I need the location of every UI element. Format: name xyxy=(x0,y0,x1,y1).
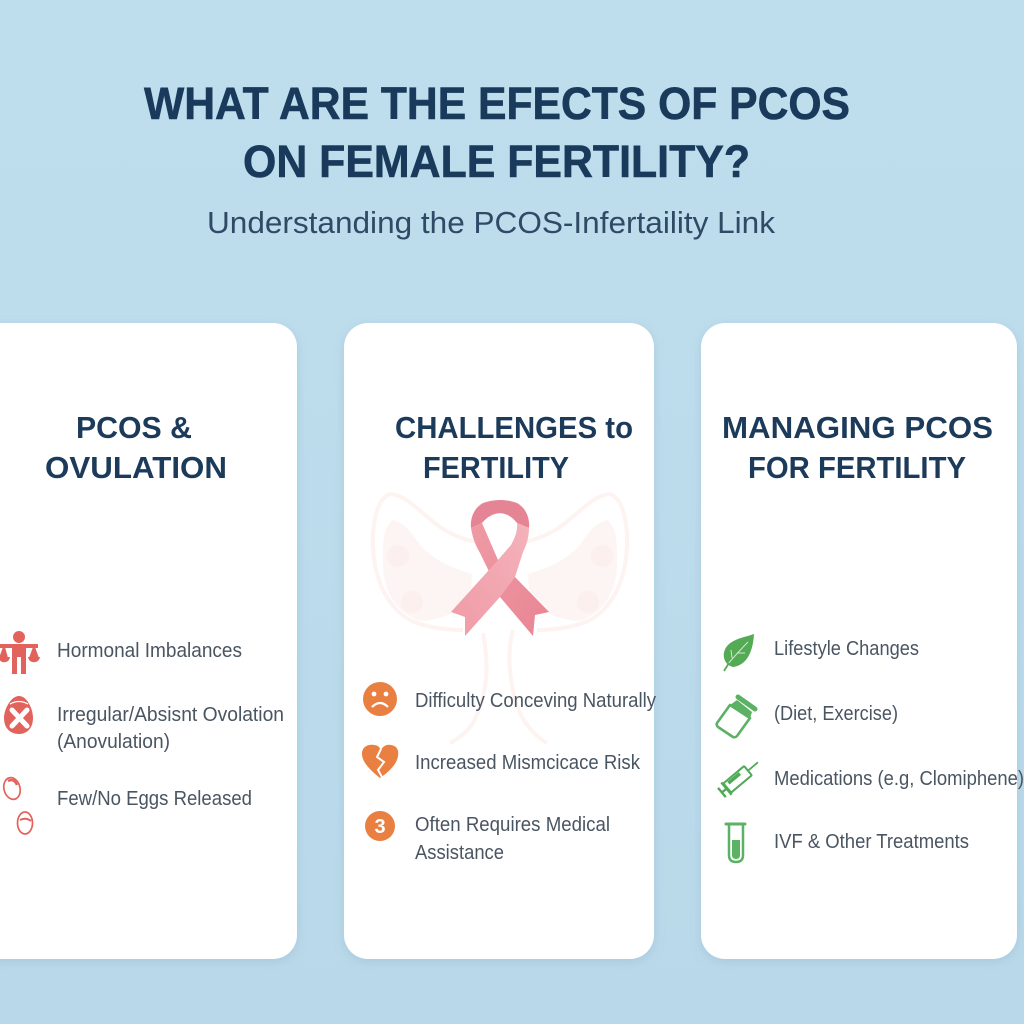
text: difficulty conceiving: Difficulty Conceving Naturally xyxy=(415,690,656,712)
title: ON FEMALE FERTILITY? xyxy=(243,136,750,187)
illustration: faint uterus xyxy=(373,494,627,743)
text: diet and exercise: (Diet, Exercise) xyxy=(774,703,898,725)
heading: managing PCOS: MANAGING PCOS xyxy=(722,410,993,445)
heading: challenges to fertility: CHALLENGES to xyxy=(395,410,633,445)
title: WHAT ARE THE EFECTS OF PCOS xyxy=(144,78,850,129)
icon: number three xyxy=(365,811,395,841)
text: irregular or absent ovulation xyxy=(57,704,284,753)
text: medical assistance xyxy=(415,814,610,864)
title xyxy=(144,78,850,187)
text: IVF and other treatments: IVF & Other Treatments xyxy=(774,831,969,853)
heading: managing PCOS: FOR FERTILITY xyxy=(748,450,966,485)
text: lifestyle changes: Lifestyle Changes xyxy=(774,638,919,660)
text: medical assistance: Often Requires Medical xyxy=(415,814,610,836)
heading: challenges to fertility xyxy=(395,410,633,485)
panel: managing PCOS xyxy=(701,323,1024,959)
icon: broken heart xyxy=(362,745,398,778)
heading: PCOS and ovulation: OVULATION xyxy=(45,450,227,485)
icon: test tube xyxy=(726,824,745,862)
text: increased miscarriage risk: Increased Mismcicace Risk xyxy=(415,752,641,774)
text: irregular or absent ovulation: Irregular/Absisnt Ovolation xyxy=(57,704,284,726)
text: hormonal imbalances: Hormonal Imbalances xyxy=(57,640,242,662)
heading: managing PCOS xyxy=(722,410,993,485)
text: medical assistance: Assistance xyxy=(415,842,504,864)
heading: PCOS and ovulation: PCOS & xyxy=(76,410,192,445)
text: irregular or absent ovulation: (Anovulation) xyxy=(57,731,170,753)
icon: leaf xyxy=(724,634,754,671)
icon: number three: 3 xyxy=(374,816,386,838)
icon: person with scales xyxy=(0,631,40,674)
icon: pill bottle xyxy=(717,697,755,737)
heading: PCOS and ovulation xyxy=(45,410,227,485)
icon: sad face xyxy=(363,682,397,716)
panel: PCOS and ovulation xyxy=(0,323,297,959)
subtitle: Understanding the PCOS-Infertaility Link xyxy=(207,205,775,240)
panel: challenges to fertility xyxy=(344,323,656,959)
icon: two eggs xyxy=(1,776,33,834)
icon: egg with cross xyxy=(4,696,33,734)
heading: challenges to fertility: FERTILITY xyxy=(423,450,569,485)
icon: syringe xyxy=(717,756,763,799)
text: few or no eggs: Few/No Eggs Released xyxy=(57,788,252,810)
icon: awareness ribbon xyxy=(451,500,549,636)
